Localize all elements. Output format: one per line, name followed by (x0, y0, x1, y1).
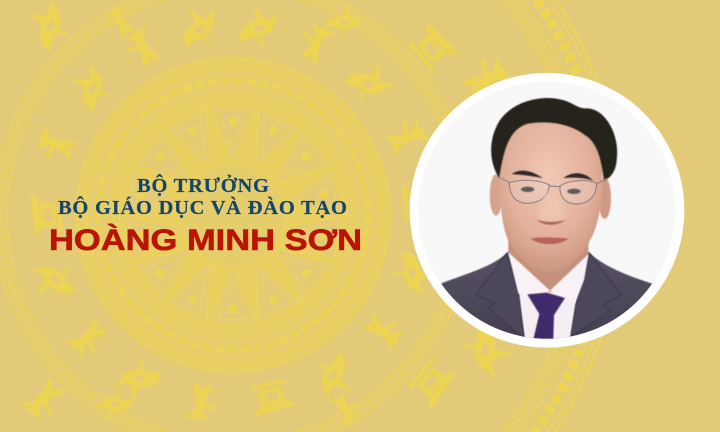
ears (490, 174, 502, 216)
eyebrows (512, 171, 543, 178)
drum star and figures (20, 0, 519, 427)
necktie (527, 293, 565, 339)
neck (508, 238, 589, 293)
white ring (410, 73, 684, 348)
nose (538, 193, 565, 223)
suit (440, 252, 653, 340)
shirt (508, 253, 588, 340)
man portrait (440, 98, 653, 340)
portrait medallion (410, 73, 684, 348)
mouth (531, 237, 568, 244)
glasses (499, 177, 607, 204)
lapels (476, 253, 524, 338)
drum hatched rings (0, 0, 563, 432)
face (500, 121, 603, 272)
heading: title line 2: BỘ GIÁO DỤC VÀ ĐÀO TẠO (58, 196, 347, 219)
photo backdrop (418, 81, 675, 339)
drum outer block ring (530, 0, 588, 432)
heading: title line 1: BỘ TRƯỞNG (137, 174, 269, 197)
heading: name: HOÀNG MINH SƠN (49, 223, 362, 257)
collar (508, 253, 589, 303)
hair (491, 98, 617, 181)
eyes (521, 187, 534, 192)
